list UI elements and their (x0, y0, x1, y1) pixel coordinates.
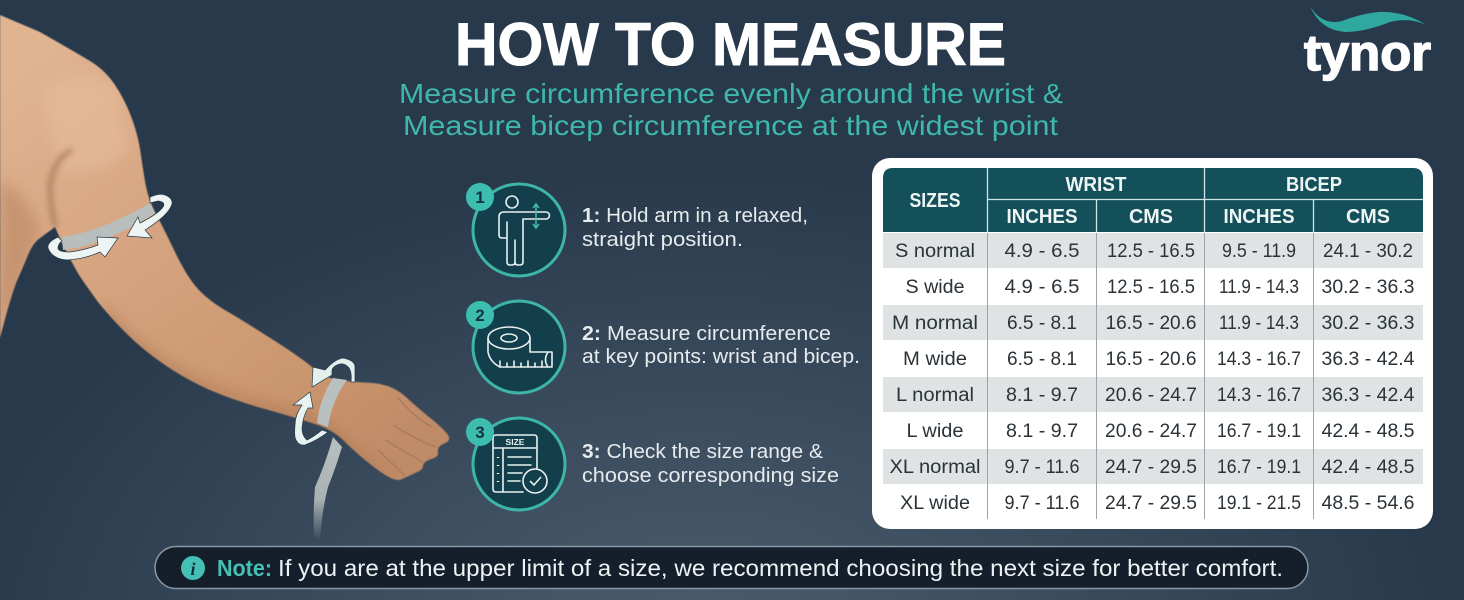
row: M normal: 6.5 - 8.1 (1007, 313, 1077, 334)
logo swoosh (1310, 6, 1426, 32)
table header (883, 168, 1423, 232)
step 2 text: 2: Measure circumference (582, 323, 831, 345)
row: M normal (883, 305, 1423, 340)
row: S normal: S normal (895, 241, 975, 262)
row: XL normal: 9.7 - 11.6 (1004, 457, 1080, 478)
step 1 (466, 183, 808, 276)
row: S normal: 9.5 - 11.9 (1222, 241, 1296, 262)
row: M wide (903, 349, 1415, 370)
table header: CMS (1346, 206, 1390, 228)
icon: person with raised arm (473, 184, 565, 276)
step 3 text: choose corresponding size (582, 465, 839, 487)
table header: BICEP (1286, 174, 1342, 196)
title: HOW TO MEASURE (455, 11, 1006, 78)
row: M wide: 6.5 - 8.1 (1007, 349, 1077, 370)
row: XL wide: 19.1 - 21.5 (1217, 493, 1301, 514)
illustration: arm with measuring tape (0, 15, 449, 540)
row: M wide: 16.5 - 20.6 (1106, 349, 1196, 370)
row: XL normal (883, 449, 1423, 484)
row: S normal: 24.1 - 30.2 (1323, 241, 1413, 262)
bicep arrow left (48, 237, 118, 260)
row: XL normal: 24.7 - 29.5 (1105, 457, 1197, 478)
row: XL wide: 9.7 - 11.6 (1004, 493, 1080, 514)
row: XL normal: XL normal (890, 457, 980, 478)
step 3 text: 3: Check the size range & (582, 441, 824, 463)
step 2 (466, 301, 860, 393)
subtitle: Measure circumference evenly around the wrist & (399, 78, 1063, 109)
row: S normal: 4.9 - 6.5 (1004, 241, 1080, 262)
step 1 text: straight position. (582, 229, 743, 251)
row: L wide: 42.4 - 48.5 (1322, 421, 1414, 442)
step 3 (466, 418, 839, 510)
step 2 text: at key points: wrist and bicep. (582, 346, 860, 368)
table card (872, 158, 1433, 529)
icon: size chart with check: SIZE (506, 437, 525, 447)
step 2 text (582, 323, 860, 368)
row: M normal: 16.5 - 20.6 (1106, 313, 1196, 334)
row: S wide: S wide (906, 277, 964, 298)
badge 2 (466, 301, 494, 329)
row: XL wide (900, 493, 1414, 514)
table header: INCHES (1006, 206, 1078, 228)
icon: info: i (190, 559, 196, 579)
row: M normal: M normal (892, 313, 978, 334)
row: M wide: 36.3 - 42.4 (1322, 349, 1415, 370)
subtitle (399, 78, 1063, 141)
row: XL wide: 24.7 - 29.5 (1105, 493, 1197, 514)
badge 2: 2 (475, 306, 485, 325)
note text: Note: (217, 555, 272, 581)
hanging tape end (314, 437, 342, 540)
badge 1: 1 (475, 188, 485, 207)
note text: If you are at the upper limit of a size, we recommend choosing the next size for better comfort. (278, 555, 1283, 581)
wrist arrow bottom (293, 392, 328, 445)
step 1 text: 1: Hold arm in a relaxed, (582, 205, 808, 227)
badge 1 (466, 183, 494, 211)
logo: tynor (1304, 6, 1431, 81)
row: S wide: 30.2 - 36.3 (1322, 277, 1414, 298)
row: S normal: 12.5 - 16.5 (1107, 241, 1195, 262)
bicep tape (62, 203, 155, 250)
subtitle: Measure bicep circumference at the widest point (403, 110, 1058, 141)
badge 3 (466, 418, 494, 446)
row: L wide: 8.1 - 9.7 (1006, 421, 1078, 442)
wrist arrow top (312, 358, 355, 387)
row: M wide: 14.3 - 16.7 (1217, 349, 1301, 370)
row: S wide: 4.9 - 6.5 (1004, 277, 1080, 298)
table header: SIZES (910, 190, 960, 212)
icon: size chart with check (473, 418, 565, 510)
row: XL wide: XL wide (900, 493, 970, 514)
table header: CMS (1129, 206, 1173, 228)
row: XL normal: 16.7 - 19.1 (1217, 457, 1301, 478)
row: M normal: 11.9 - 14.3 (1219, 313, 1299, 334)
badge 3: 3 (475, 423, 485, 442)
row: XL wide: 48.5 - 54.6 (1322, 493, 1414, 514)
row: S wide: 11.9 - 14.3 (1219, 277, 1299, 298)
row: L normal: L normal (896, 385, 974, 406)
row: L wide: 20.6 - 24.7 (1105, 421, 1197, 442)
row: L normal (883, 377, 1423, 412)
finger details (378, 398, 436, 476)
row: L normal: 36.3 - 42.4 (1322, 385, 1415, 406)
wrist tape (317, 378, 347, 427)
row: L normal: 14.3 - 16.7 (1217, 385, 1301, 406)
arm and torso (0, 15, 449, 480)
row: L wide (906, 421, 1414, 442)
row: S wide (906, 277, 1414, 298)
table header: INCHES (1224, 206, 1294, 228)
row: L normal: 20.6 - 24.7 (1105, 385, 1197, 406)
row: L normal: 8.1 - 9.7 (1006, 385, 1078, 406)
row: S wide: 12.5 - 16.5 (1107, 277, 1195, 298)
icon: tape roll (473, 301, 565, 393)
row: L wide: 16.7 - 19.1 (1217, 421, 1301, 442)
row: XL normal: 42.4 - 48.5 (1322, 457, 1414, 478)
bicep arrow right (127, 194, 172, 238)
row: S normal (883, 233, 1423, 268)
table header: WRIST (1066, 174, 1126, 196)
step 1 text (582, 205, 808, 251)
row: M normal: 30.2 - 36.3 (1322, 313, 1414, 334)
row: L wide: L wide (906, 421, 964, 442)
row: M wide: M wide (903, 349, 967, 370)
step 3 text (582, 441, 839, 487)
arm shading (0, 75, 380, 478)
logo wordmark: tynor (1304, 25, 1431, 81)
size table (872, 158, 1433, 529)
icon: info (181, 556, 205, 580)
note bar (155, 546, 1308, 588)
